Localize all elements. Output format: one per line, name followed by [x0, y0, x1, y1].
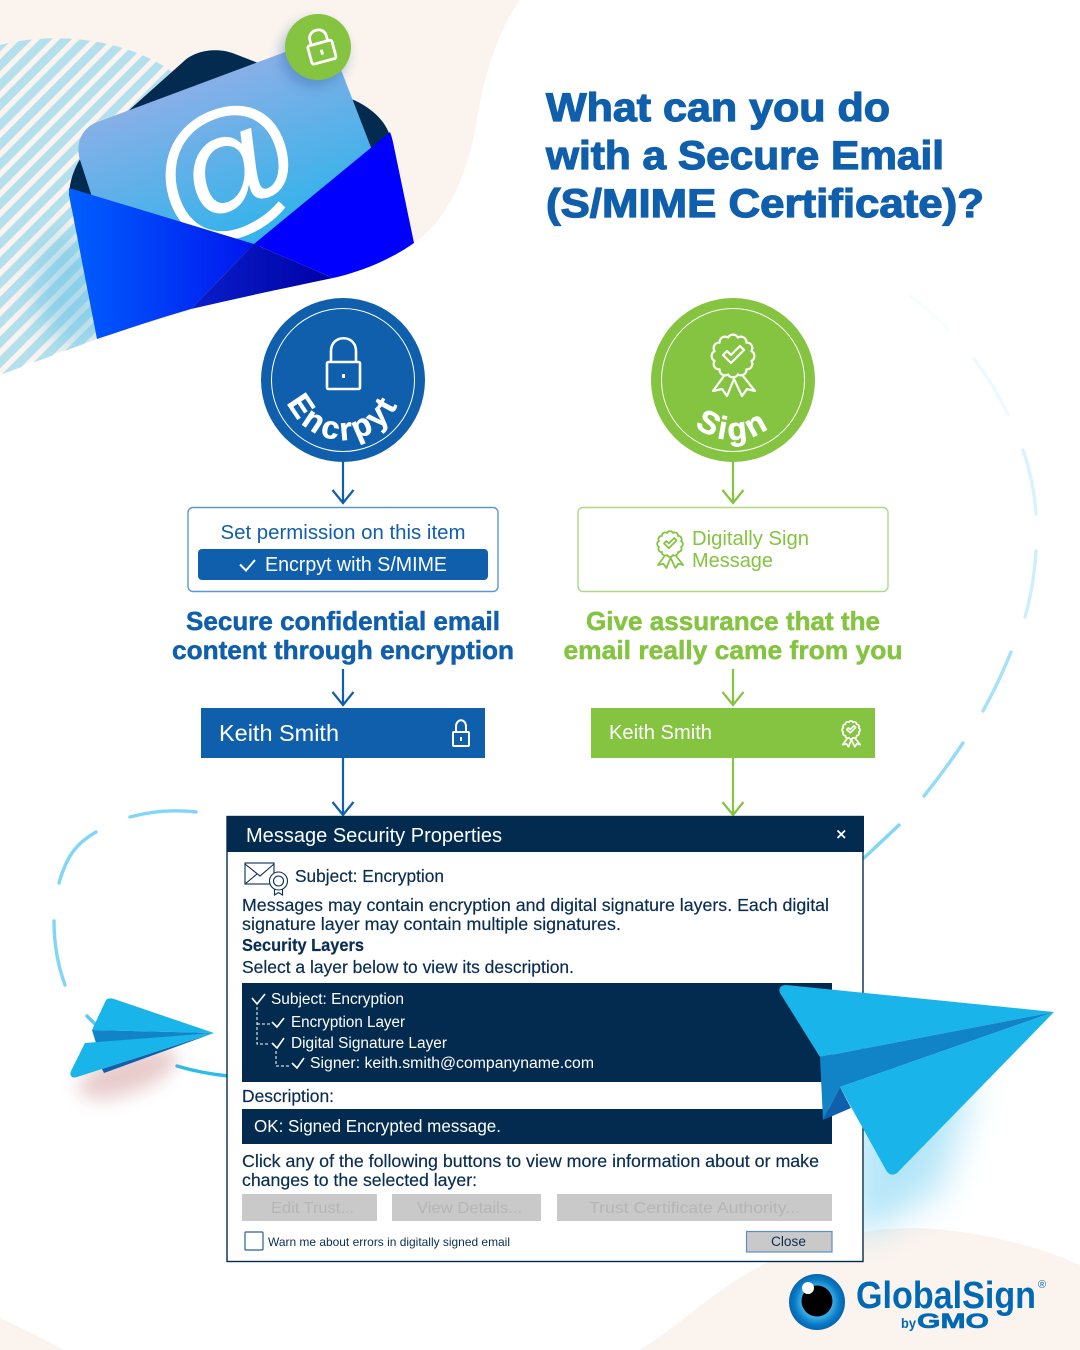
- panel: encrypt column: [172, 298, 514, 816]
- envelope fold shadow: [191, 244, 333, 309]
- security layers list: [242, 983, 832, 1082]
- icon: green lock badge: [281, 14, 351, 87]
- arrow: [722, 758, 744, 815]
- name bar: encrypt: [201, 708, 485, 758]
- letter: [78, 36, 372, 250]
- security layers list: Signer: keith.smith@companyname.com: [310, 1055, 594, 1072]
- encrypt circle badge: [261, 298, 425, 462]
- dialog intro text: Messages may contain encryption and digital signature layers. Each digital: [242, 895, 829, 915]
- digitally sign box: Message: [692, 550, 773, 572]
- background blob: bottom left corner: [0, 1318, 64, 1350]
- title: (S/MIME Certificate)?: [546, 182, 984, 226]
- arrow: [722, 461, 744, 503]
- instruction text: changes to the selected layer:: [242, 1170, 477, 1190]
- description: Description:: [242, 1086, 334, 1106]
- background blob: bottom right: [640, 1228, 1080, 1350]
- title: with a Secure Email: [545, 134, 944, 178]
- arrow: [332, 461, 354, 503]
- background blob: top left: [0, 0, 520, 374]
- permission box: Encrpyt with S/MIME: [265, 554, 447, 576]
- panel: sign column: [564, 298, 902, 816]
- dialog intro text: Select a layer below to view its description.: [242, 957, 574, 977]
- envelope back: [69, 50, 392, 300]
- digitally sign box: Digitally Sign: [692, 528, 809, 550]
- dialog header: Message Security Properties: [246, 825, 502, 847]
- security layers list: Subject: Encryption: [271, 991, 404, 1008]
- digitally sign box: [578, 508, 888, 592]
- permission box: [188, 508, 498, 592]
- sign description: [564, 606, 902, 665]
- instruction text: [242, 1151, 819, 1190]
- arrow: [332, 758, 354, 815]
- close button: [746, 1232, 832, 1252]
- encrypt description: [172, 606, 514, 665]
- sign circle badge: [651, 298, 815, 462]
- dialog intro text: Security Layers: [242, 935, 364, 955]
- logo: GlobalSign by GMO: GlobalSign: [856, 1275, 1036, 1317]
- name bar: sign: [591, 708, 875, 758]
- disabled buttons: [242, 1194, 832, 1221]
- logo: GlobalSign by GMO: [789, 1274, 1046, 1333]
- plane glow: [850, 1080, 975, 1235]
- description value: OK: Signed Encrypted message.: [254, 1116, 501, 1136]
- logo: GlobalSign by GMO: ®: [1038, 1279, 1046, 1291]
- sign circle badge: Sign: [697, 410, 768, 447]
- encrypt circle badge: Encrpyt: [287, 392, 398, 446]
- description value: [242, 1109, 832, 1144]
- encrypt description: Secure confidential email: [186, 606, 500, 636]
- dialog intro text: [242, 866, 829, 977]
- icon: open envelope: [69, 36, 414, 339]
- dialog header: [227, 816, 864, 852]
- dialog intro text: signature layer may contain multiple signatures.: [242, 914, 621, 934]
- icon: large paper plane: [779, 985, 1054, 1175]
- title: [545, 86, 984, 226]
- security layers list: Encryption Layer: [291, 1014, 405, 1031]
- at sign: @: [125, 61, 326, 271]
- dashed flight path: left: [54, 811, 228, 1076]
- logo: GlobalSign by GMO: GMO: [917, 1310, 989, 1333]
- disabled buttons: Edit Trust...: [271, 1200, 354, 1217]
- icon: signed envelope: [245, 863, 288, 895]
- disabled buttons: View Details...: [417, 1200, 522, 1217]
- name bar: encrypt: Keith Smith: [219, 720, 339, 746]
- close button: Close: [771, 1234, 806, 1249]
- name bar: sign: Keith Smith: [609, 722, 712, 744]
- encrypt description: content through encryption: [172, 635, 514, 665]
- panel: message security properties dialog: [227, 816, 864, 1262]
- arrow: [332, 669, 354, 705]
- logo: GlobalSign by GMO: by: [901, 1315, 916, 1331]
- dashed flight path: right: [864, 296, 1036, 858]
- security layers list: Digital Signature Layer: [291, 1035, 447, 1052]
- title: What can you do: [546, 86, 890, 130]
- icon: small paper plane: [70, 998, 214, 1078]
- warning checkbox: Warn me about errors in digitally signed email: [268, 1235, 510, 1249]
- envelope right flap: [254, 132, 414, 278]
- plane shadow: [72, 1036, 184, 1110]
- sign description: email really came from you: [564, 635, 902, 665]
- disabled buttons: Trust Certificate Authority...: [589, 1200, 800, 1217]
- permission box: Set permission on this item: [220, 522, 466, 544]
- arrow: [722, 669, 744, 705]
- striped decoration: [0, 38, 172, 374]
- sign description: Give assurance that the: [586, 606, 880, 636]
- instruction text: Click any of the following buttons to view more information about or make: [242, 1151, 819, 1171]
- envelope left flap: [69, 188, 254, 339]
- dialog intro text: Subject: Encryption: [295, 866, 444, 886]
